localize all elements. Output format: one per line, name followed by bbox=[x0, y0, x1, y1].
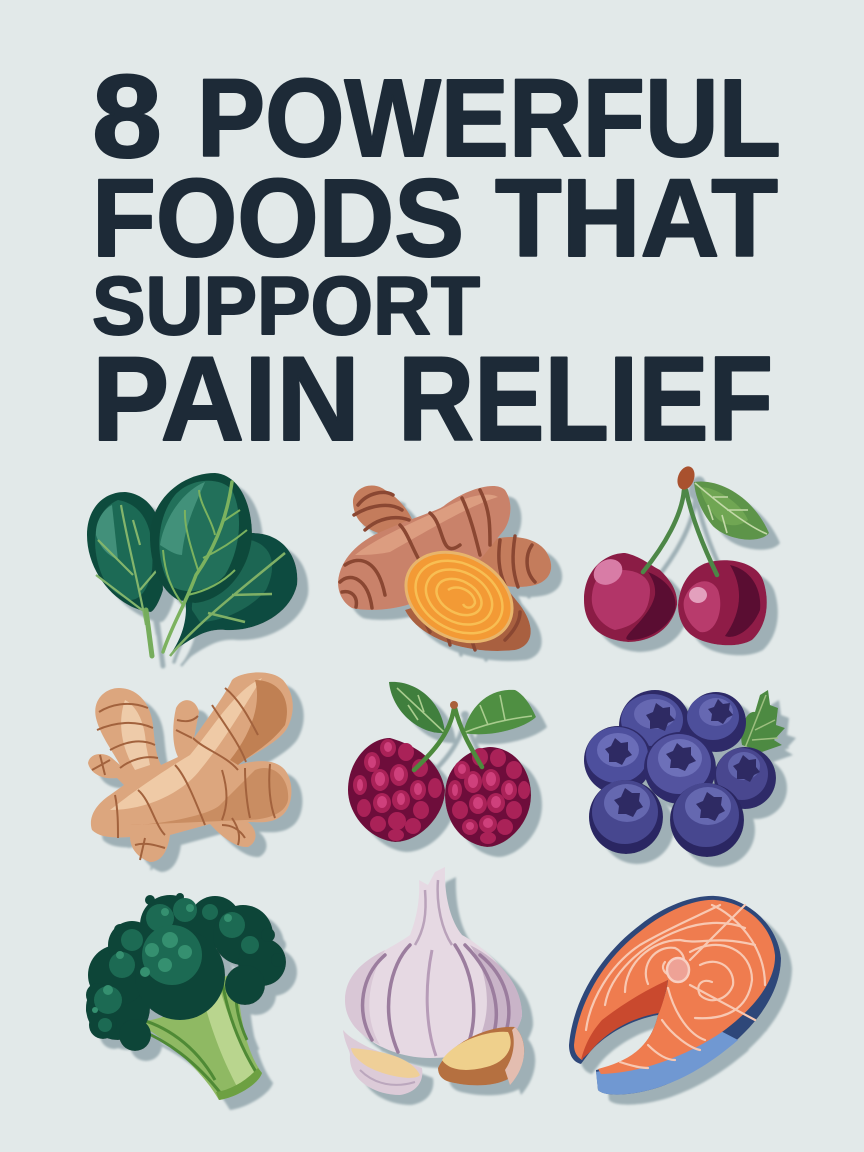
title: 8 bbox=[92, 51, 162, 183]
title: POWERFUL bbox=[197, 57, 781, 180]
icon: spinach bbox=[87, 473, 297, 656]
icon: garlic bbox=[343, 867, 524, 1095]
icon: cherries bbox=[584, 464, 769, 645]
title: RELIEF bbox=[398, 332, 773, 466]
icon: ginger bbox=[88, 672, 293, 862]
title: THAT bbox=[495, 157, 778, 280]
title: SUPPORT bbox=[92, 259, 480, 352]
icon: broccoli bbox=[86, 893, 286, 1100]
title: PAIN bbox=[92, 332, 360, 466]
title: FOODS bbox=[92, 157, 464, 280]
icon: blueberries bbox=[584, 690, 785, 857]
icon: turmeric bbox=[338, 486, 551, 659]
icon: salmon bbox=[569, 896, 781, 1095]
icon: raspberries bbox=[348, 682, 536, 847]
title bbox=[92, 51, 781, 466]
